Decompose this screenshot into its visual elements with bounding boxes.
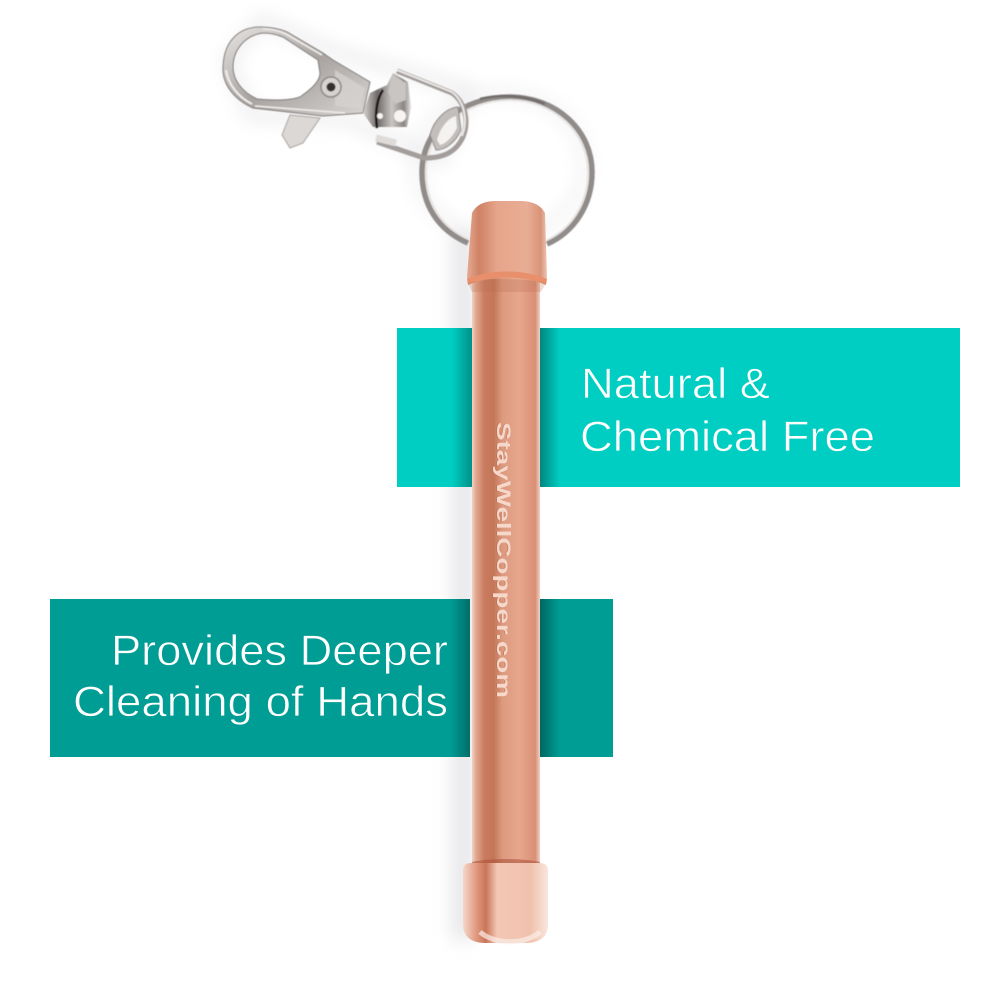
engraved text: StayWellCopper.com (491, 422, 512, 698)
icon: split key ring (422, 96, 592, 244)
tube bottom cap (463, 859, 548, 943)
tube edge shadows on panels (450, 328, 560, 757)
clasp hook body (223, 27, 370, 116)
heading: provides deeper cleaning of hands: Cleaning of Hands (73, 678, 448, 726)
engraved text (491, 422, 513, 698)
heading: natural and chemical free: Chemical Free (580, 413, 875, 461)
tube shaft (472, 270, 540, 870)
clasp rivet (321, 77, 341, 97)
heading: provides deeper cleaning of hands (73, 627, 448, 726)
tube top cap (467, 201, 547, 292)
panel: provides deeper cleaning (50, 599, 613, 757)
icon: lobster clasp (223, 27, 466, 158)
icon: copper tube (463, 201, 548, 943)
heading: natural and chemical free: Natural & (581, 360, 770, 408)
panel: natural and chemical free (397, 328, 960, 487)
heading: natural and chemical free (580, 360, 875, 461)
heading: provides deeper cleaning of hands: Provides Deeper (111, 627, 448, 675)
engraved text: StayWellCopper.com (492, 422, 513, 698)
soft photo shadows (228, 20, 585, 940)
clasp swivel loop (377, 71, 466, 158)
clasp trigger (282, 115, 320, 148)
clasp swivel barrel (363, 73, 411, 127)
